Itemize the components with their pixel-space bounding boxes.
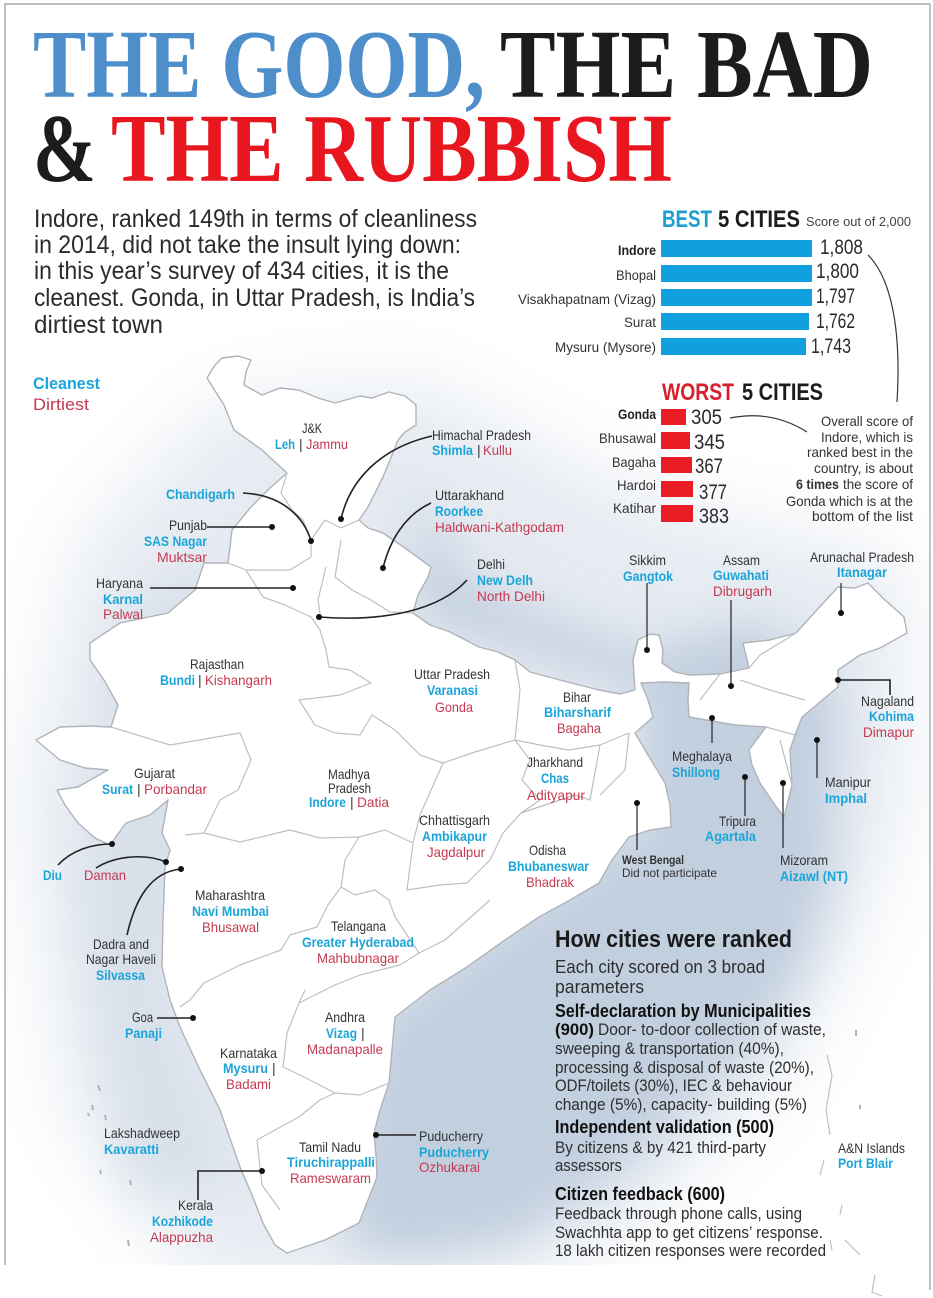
Gujarat label: Porbandar: [144, 781, 207, 797]
intro text block: in 2014, did not take the insult lying down:: [34, 231, 461, 259]
Kerala label: Kerala: [178, 1197, 213, 1213]
Bihar label: Biharsharif: [544, 704, 611, 720]
Punjab label: Muktsar: [157, 549, 207, 565]
background glow: [20, 380, 910, 1290]
Daman label: [84, 857, 169, 883]
title: THE RUBBISH: [111, 95, 672, 203]
best 5 cities bar chart: 1,743: [811, 335, 851, 358]
Dadra and Nagar Haveli label: [86, 866, 184, 983]
J&K label: Jammu: [306, 436, 348, 452]
Lakshadweep label: Lakshadweep: [104, 1125, 180, 1141]
Goa label: Goa: [132, 1009, 153, 1025]
Karnataka label: |: [272, 1060, 276, 1076]
worst 5 cities bar chart: [599, 379, 823, 528]
panel: how cities were ranked: Independent validation (500): [555, 1117, 774, 1137]
Uttar Pradesh label: Gonda: [435, 699, 473, 715]
worst 5 cities bar chart: 383: [699, 505, 729, 528]
Tripura label: Tripura: [719, 813, 756, 829]
Uttarakhand label: Uttarakhand: [435, 487, 504, 503]
panel: how cities were ranked: (900): [555, 1020, 594, 1039]
Diu label: Diu: [43, 867, 62, 883]
Chhattisgarh label: Chhattisgarh: [419, 812, 490, 828]
legend: Cleanest: [33, 374, 100, 393]
Andhra label: |: [361, 1025, 365, 1041]
Assam label: Guwahati: [713, 567, 769, 583]
Telangana label: [302, 918, 414, 966]
Arunachal Pradesh label: Itanagar: [837, 564, 888, 580]
West Bengal label: [622, 800, 717, 880]
Uttar Pradesh label: Uttar Pradesh: [414, 666, 490, 682]
Jharkhand label: Jharkhand: [527, 754, 583, 770]
Madhya Pradesh label: Indore: [309, 794, 346, 810]
Delhi label: Delhi: [477, 556, 505, 572]
Telangana label: Telangana: [331, 918, 386, 934]
Rajasthan label: |: [198, 672, 202, 688]
Andhra label: [307, 1009, 383, 1057]
panel: how cities were ranked: Swachhta app to get citizens’ response.: [555, 1223, 823, 1242]
best 5 cities bar chart: 1,762: [816, 310, 855, 333]
Puducherry label: Puducherry: [419, 1128, 483, 1144]
legend: Dirtiest: [33, 395, 89, 414]
comparison note: Overall score of: [821, 413, 913, 429]
Mizoram label: Aizawl (NT): [780, 868, 848, 884]
best 5 cities bar chart: 1,808: [820, 236, 863, 259]
Daman label: Daman: [84, 867, 126, 883]
Mizoram label: Mizoram: [780, 852, 828, 868]
Bihar label: [544, 689, 611, 736]
intro text block: Indore, ranked 149th in terms of cleanliness: [34, 205, 477, 233]
Arunachal Pradesh label: [810, 549, 914, 616]
Nagaland label: Nagaland: [861, 693, 914, 709]
panel: how cities were ranked: How cities were ranked: [555, 926, 792, 953]
Dadra and Nagar Haveli label: Dadra and: [93, 936, 149, 952]
comparison note: Gonda which is at the: [786, 493, 913, 509]
Himachal Pradesh label: Himachal Pradesh: [432, 427, 531, 443]
worst 5 cities bar chart: 345: [694, 431, 725, 454]
Gujarat label: Gujarat: [134, 765, 175, 781]
Chandigarh label: [166, 486, 314, 544]
worst 5 cities bar chart: WORST: [662, 379, 734, 406]
Chandigarh label: Chandigarh: [166, 486, 235, 502]
Gujarat label: |: [137, 781, 141, 797]
Mizoram label: [780, 780, 848, 884]
Rajasthan label: [160, 656, 272, 688]
Sikkim label: Sikkim: [629, 552, 666, 568]
map of India: [36, 356, 907, 1296]
worst 5 cities bar chart: Bagaha: [612, 454, 656, 470]
best 5 cities bar chart: Visakhapatnam (Vizag): [518, 291, 656, 307]
Assam label: [713, 552, 772, 689]
Bihar label: Bihar: [563, 689, 591, 705]
comparison note: 6 times: [796, 476, 839, 492]
Madhya Pradesh label: Pradesh: [328, 780, 371, 796]
Punjab label: Punjab: [169, 517, 207, 533]
Tripura label: [705, 774, 756, 844]
best 5 cities bar chart: Mysuru (Mysore): [555, 339, 656, 355]
Uttarakhand label: [380, 487, 564, 571]
best 5 cities bar chart: 1,800: [816, 260, 859, 283]
Gujarat label: Surat: [102, 781, 133, 797]
comparison note: bottom of the list: [812, 508, 913, 524]
worst 5 cities bar chart: 367: [695, 455, 723, 478]
Andhra label: Vizag: [326, 1025, 357, 1041]
Jharkhand label: Chas: [541, 770, 569, 786]
Maharashtra label: Maharashtra: [195, 887, 265, 903]
Haryana label: Karnal: [103, 591, 143, 607]
Goa label: Panaji: [125, 1025, 162, 1041]
comparison note: [786, 413, 913, 524]
Himachal Pradesh label: Kullu: [483, 442, 512, 458]
Madhya Pradesh label: |: [350, 794, 354, 810]
Rajasthan label: Kishangarh: [205, 672, 272, 688]
Delhi label: [316, 556, 545, 620]
comparison note: ranked best in the: [807, 444, 913, 460]
Karnataka label: Badami: [226, 1076, 271, 1092]
Uttarakhand label: Haldwani-Kathgodam: [435, 519, 564, 535]
J&K label: J&K: [302, 420, 323, 436]
J&K label: Leh: [275, 436, 295, 452]
intro text block: [34, 205, 477, 339]
Dadra and Nagar Haveli label: Silvassa: [96, 967, 145, 983]
panel: how cities were ranked: sweeping & transportation (40%),: [555, 1039, 784, 1058]
Manipur label: Manipur: [825, 774, 871, 790]
panel: how cities were ranked: [555, 926, 826, 1260]
worst 5 cities bar chart: Gonda: [618, 406, 656, 422]
arrow: Gonda to note: [730, 416, 807, 432]
Chhattisgarh label: [419, 812, 490, 860]
Odisha label: [508, 842, 589, 890]
panel: how cities were ranked: ODF/toilets (30%), IEC & behaviour: [555, 1076, 792, 1095]
Himachal Pradesh label: |: [477, 442, 481, 458]
Arunachal Pradesh label: Arunachal Pradesh: [810, 549, 914, 565]
Punjab label: SAS Nagar: [144, 533, 207, 549]
panel: how cities were ranked: processing & disposal of waste (20%),: [555, 1058, 814, 1077]
Himachal Pradesh label: Shimla: [432, 442, 473, 458]
panel: how cities were ranked: change (5%), capacity- building (5%): [555, 1095, 807, 1114]
Nagaland label: Kohima: [869, 708, 914, 724]
title: THE GOOD,: [33, 11, 485, 119]
Tamil Nadu label: [287, 1139, 375, 1186]
Dadra and Nagar Haveli label: Nagar Haveli: [86, 951, 156, 967]
arrow: Indore to note: [868, 255, 898, 402]
Maharashtra label: [192, 887, 269, 935]
Chhattisgarh label: Jagdalpur: [427, 844, 485, 860]
Odisha label: Bhadrak: [526, 874, 575, 890]
Tamil Nadu label: Tamil Nadu: [299, 1139, 361, 1155]
title: [33, 11, 873, 203]
Diu label: [43, 841, 115, 883]
Haryana label: Palwal: [103, 606, 143, 622]
Odisha label: Bhubaneswar: [508, 858, 589, 874]
panel: how cities were ranked: parameters: [555, 977, 644, 997]
state boundaries: [111, 473, 805, 1210]
Jharkhand label: [527, 754, 585, 803]
Kerala label: Alappuzha: [150, 1229, 213, 1245]
worst 5 cities bar chart: Hardoi: [617, 477, 656, 493]
Andhra label: Madanapalle: [307, 1041, 383, 1057]
Goa label: [125, 1009, 196, 1041]
Karnataka label: [220, 1045, 277, 1092]
intro text block: cleanest. Gonda, in Uttar Pradesh, is India’s: [34, 284, 475, 312]
worst 5 cities bar chart: Katihar: [613, 500, 656, 516]
Haryana label: [96, 575, 296, 622]
Lakshadweep label: Kavaratti: [104, 1141, 159, 1157]
Uttar Pradesh label: [414, 666, 490, 715]
panel: how cities were ranked: assessors: [555, 1156, 622, 1175]
comparison note: the score of: [843, 476, 913, 492]
best 5 cities bar chart: 5 CITIES: [718, 206, 800, 233]
panel: how cities were ranked: Citizen feedback (600): [555, 1184, 725, 1204]
worst 5 cities bar chart: 5 CITIES: [742, 379, 823, 406]
Madhya Pradesh label: [309, 766, 389, 810]
panel: how cities were ranked: By citizens & by 421 third-party: [555, 1138, 766, 1157]
Nagaland label: Dimapur: [863, 724, 914, 740]
Himachal Pradesh label: [338, 427, 531, 522]
A&N Islands label: Port Blair: [838, 1155, 893, 1171]
Puducherry label: [373, 1128, 489, 1175]
best 5 cities bar chart: 1,797: [816, 285, 855, 308]
Meghalaya label: [672, 715, 732, 780]
Uttar Pradesh label: Varanasi: [427, 682, 478, 698]
Kerala label: Kozhikode: [152, 1213, 213, 1229]
Puducherry label: Puducherry: [419, 1144, 489, 1160]
panel: how cities were ranked: Feedback through phone calls, using: [555, 1204, 802, 1223]
Madhya Pradesh label: Madhya: [328, 766, 370, 782]
Maharashtra label: Navi Mumbai: [192, 903, 269, 919]
Delhi label: North Delhi: [477, 588, 545, 604]
title: &: [33, 95, 96, 203]
Manipur label: [814, 737, 871, 806]
J&K label: [275, 420, 348, 452]
Bihar label: Bagaha: [557, 720, 601, 736]
Manipur label: Imphal: [825, 790, 867, 806]
best 5 cities bar chart: Indore: [618, 242, 656, 258]
Meghalaya label: Meghalaya: [672, 748, 732, 764]
best 5 cities bar chart: Bhopal: [616, 267, 656, 283]
Telangana label: Greater Hyderabad: [302, 934, 414, 950]
Andhra label: Andhra: [325, 1009, 365, 1025]
Jharkhand label: Adityapur: [527, 787, 585, 803]
best 5 cities bar chart: BEST: [662, 206, 712, 233]
A&N Islands label: A&N Islands: [838, 1140, 905, 1156]
Telangana label: Mahbubnagar: [317, 950, 399, 966]
Chhattisgarh label: Ambikapur: [422, 828, 487, 844]
Assam label: Assam: [723, 552, 760, 568]
Puducherry label: Ozhukarai: [419, 1159, 480, 1175]
panel: how cities were ranked: 18 lakh citizen responses were recorded: [555, 1241, 826, 1260]
West Bengal label: West Bengal: [622, 853, 684, 867]
Karnataka label: Karnataka: [220, 1045, 277, 1061]
Delhi label: New Delh: [477, 572, 533, 588]
worst 5 cities bar chart: 377: [699, 481, 727, 504]
Tamil Nadu label: Tiruchirappalli: [287, 1154, 375, 1170]
Nagaland label: [835, 677, 914, 740]
title: THE BAD: [500, 11, 873, 119]
Kerala label: [150, 1168, 265, 1245]
Lakshadweep label: [104, 1125, 180, 1157]
worst 5 cities bar chart: Bhusawal: [599, 430, 656, 446]
Meghalaya label: Shillong: [672, 764, 720, 780]
Madhya Pradesh label: Datia: [357, 794, 389, 810]
A&N Islands label: [838, 1140, 905, 1171]
panel: how cities were ranked: Self-declaration by Municipalities: [555, 1001, 811, 1021]
comparison note: country, is about: [814, 460, 913, 476]
best 5 cities bar chart: Surat: [624, 314, 656, 330]
worst 5 cities bar chart: 305: [691, 406, 722, 429]
Punjab label: [144, 517, 275, 565]
Rajasthan label: Bundi: [160, 672, 195, 688]
intro text block: dirtiest town: [34, 311, 163, 339]
panel: how cities were ranked: Each city scored on 3 broad: [555, 957, 765, 977]
Tamil Nadu label: Rameswaram: [290, 1170, 371, 1186]
intro text block: in this year’s survey of 434 cities, it is the: [34, 257, 449, 285]
islands: [820, 1055, 882, 1296]
Rajasthan label: Rajasthan: [190, 656, 244, 672]
West Bengal label: Did not participate: [622, 866, 717, 880]
Sikkim label: [623, 552, 673, 653]
Odisha label: Odisha: [529, 842, 566, 858]
panel: how cities were ranked: Door- to-door collection of waste,: [598, 1020, 826, 1039]
Uttarakhand label: Roorkee: [435, 503, 483, 519]
Sikkim label: Gangtok: [623, 568, 673, 584]
J&K label: |: [299, 436, 303, 452]
Assam label: Dibrugarh: [713, 583, 772, 599]
Karnataka label: Mysuru: [223, 1060, 268, 1076]
Tripura label: Agartala: [705, 828, 756, 844]
comparison note: Indore, which is: [821, 429, 913, 445]
Maharashtra label: Bhusawal: [202, 919, 259, 935]
best 5 cities bar chart: Score out of 2,000: [806, 214, 911, 229]
best 5 cities bar chart: [518, 206, 911, 358]
Haryana label: Haryana: [96, 575, 143, 591]
Gujarat label: [102, 765, 207, 797]
legend: [33, 374, 100, 414]
